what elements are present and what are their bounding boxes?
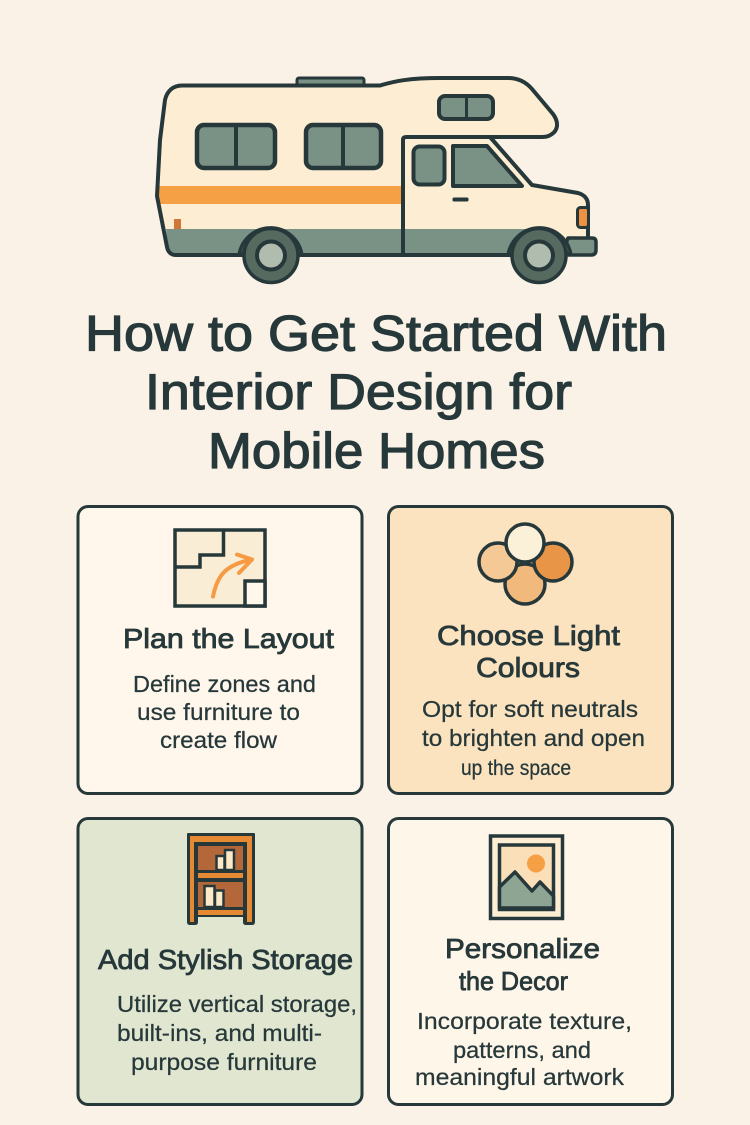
body text	[133, 671, 316, 753]
title: Interior Design for	[145, 364, 572, 420]
panel: choose light colours	[388, 506, 672, 794]
panel: personalize the decor	[388, 818, 672, 1104]
heading: Colours	[476, 652, 580, 683]
door handle	[453, 198, 468, 201]
body text: built-ins, and multi-	[117, 1020, 322, 1046]
headlight	[578, 208, 588, 228]
title	[85, 306, 667, 479]
body text: Incorporate texture,	[417, 1008, 632, 1034]
icon: bookshelf	[187, 833, 255, 925]
icon: framed picture	[490, 836, 562, 918]
body text	[415, 1008, 632, 1090]
heading: Choose Light	[437, 620, 620, 651]
body text: up the space	[461, 756, 571, 780]
heading	[445, 933, 600, 996]
body outline	[157, 78, 588, 255]
heading	[437, 620, 620, 683]
windshield	[453, 146, 522, 186]
body text: Define zones and	[133, 671, 316, 697]
cab door line	[403, 137, 490, 255]
window: over-cab	[439, 96, 493, 119]
body text: use furniture to	[137, 699, 300, 725]
body text: patterns, and	[453, 1037, 591, 1063]
illustration: motorhome	[157, 78, 596, 282]
bumper	[562, 238, 596, 255]
body text	[422, 696, 645, 780]
body text: create flow	[160, 727, 278, 753]
small marker light	[174, 219, 181, 229]
books	[204, 850, 234, 907]
window: cab side	[414, 146, 444, 184]
rear wheel	[239, 228, 302, 282]
icon: colour swatches	[479, 524, 572, 604]
lower grey band	[166, 229, 540, 253]
window: rear	[197, 125, 275, 168]
body text: Opt for soft neutrals	[422, 696, 638, 722]
camper body	[157, 78, 588, 255]
icon: floor plan	[175, 530, 265, 606]
title: Mobile Homes	[208, 423, 545, 479]
panel: plan the layout	[78, 506, 362, 794]
body text: to brighten and open	[422, 725, 645, 751]
body text	[117, 991, 357, 1075]
heading: Personalize	[445, 933, 600, 964]
window: middle	[306, 125, 381, 168]
heading: Add Stylish Storage	[98, 944, 353, 975]
orange stripe	[159, 186, 401, 204]
panel: add stylish storage	[78, 818, 362, 1104]
body text: Utilize vertical storage,	[117, 991, 357, 1017]
heading: the Decor	[459, 966, 568, 996]
body text: meaningful artwork	[415, 1064, 624, 1090]
roof vent	[297, 78, 364, 87]
body text: purpose furniture	[131, 1049, 317, 1075]
front wheel	[508, 228, 571, 282]
heading: Plan the Layout	[123, 623, 334, 654]
title: How to Get Started With	[85, 306, 667, 362]
